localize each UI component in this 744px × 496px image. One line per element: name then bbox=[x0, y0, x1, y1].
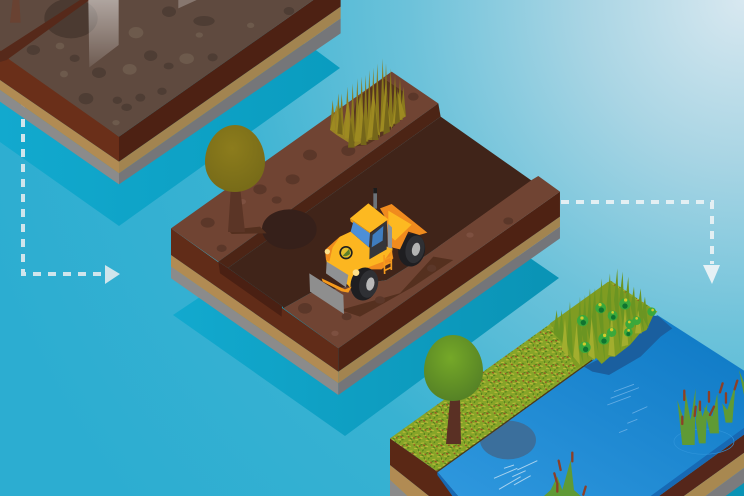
lower soil strip bbox=[283, 176, 560, 348]
right strata bbox=[659, 433, 744, 496]
trench floor bbox=[228, 117, 532, 308]
green reed bed bbox=[550, 268, 656, 368]
trench wall bbox=[218, 103, 441, 268]
strata bbox=[171, 267, 338, 395]
shadow: upper platform bbox=[0, 0, 340, 226]
soil spots bbox=[201, 93, 513, 320]
shadow: wetland lower right bbox=[724, 478, 744, 496]
water front lip bbox=[437, 472, 458, 496]
left strata bbox=[390, 480, 407, 496]
water ripples bbox=[607, 384, 647, 433]
surface bbox=[0, 0, 313, 137]
panel: upper platform excavated soil bbox=[0, 0, 341, 184]
rim strip bbox=[0, 0, 89, 62]
rear wheel bbox=[395, 231, 428, 269]
hood bbox=[325, 232, 393, 287]
lift arm bbox=[322, 278, 352, 293]
upper soil strip bbox=[171, 72, 438, 262]
tree shadow bbox=[44, 0, 98, 38]
tree shadow on water bbox=[480, 421, 536, 459]
icon: green tree bbox=[424, 335, 483, 444]
water bbox=[437, 315, 744, 496]
arrow: right dashed path bbox=[561, 202, 720, 284]
front wheel bbox=[347, 265, 381, 303]
cattail clump right bbox=[674, 370, 744, 454]
cab side strip bbox=[388, 223, 392, 248]
grass water edge bbox=[437, 360, 592, 472]
cab door bbox=[369, 221, 387, 259]
windscreen bbox=[351, 222, 370, 247]
icon: dry tree bbox=[205, 125, 265, 232]
panel: centre platform with trench bbox=[171, 72, 560, 395]
panel: wetland platform bbox=[390, 268, 744, 496]
cattail clump bottom bbox=[544, 453, 586, 496]
blade bbox=[309, 273, 344, 314]
translucent beam bbox=[88, 0, 119, 67]
tractor shadow on soil bbox=[340, 257, 453, 317]
lower hood side bbox=[350, 250, 393, 290]
cab roof bbox=[350, 203, 388, 233]
water edge highlight bbox=[651, 427, 744, 496]
flower clusters bbox=[577, 298, 656, 353]
arrow: left dashed path bbox=[23, 104, 120, 284]
icon: bulldozer tractor bbox=[309, 188, 428, 314]
shadow: centre platform bbox=[173, 230, 559, 436]
reed shadow on water bbox=[584, 313, 672, 375]
icon: dry reed clump bbox=[330, 58, 406, 148]
tree trunk shadow bbox=[228, 227, 267, 234]
exhaust bbox=[373, 189, 377, 209]
cab roof front bbox=[350, 218, 370, 234]
tree shadow bbox=[262, 209, 317, 249]
grass strip bbox=[390, 281, 657, 472]
headlights bbox=[353, 269, 359, 276]
badge bbox=[339, 246, 353, 259]
ladder bbox=[384, 250, 391, 274]
left fender bbox=[325, 237, 340, 262]
rear body bbox=[380, 204, 427, 249]
door window bbox=[372, 226, 383, 247]
grille bbox=[326, 262, 348, 287]
tree trunk bbox=[10, 0, 21, 23]
soil spots bbox=[27, 6, 294, 111]
trench cut end bbox=[218, 262, 282, 317]
